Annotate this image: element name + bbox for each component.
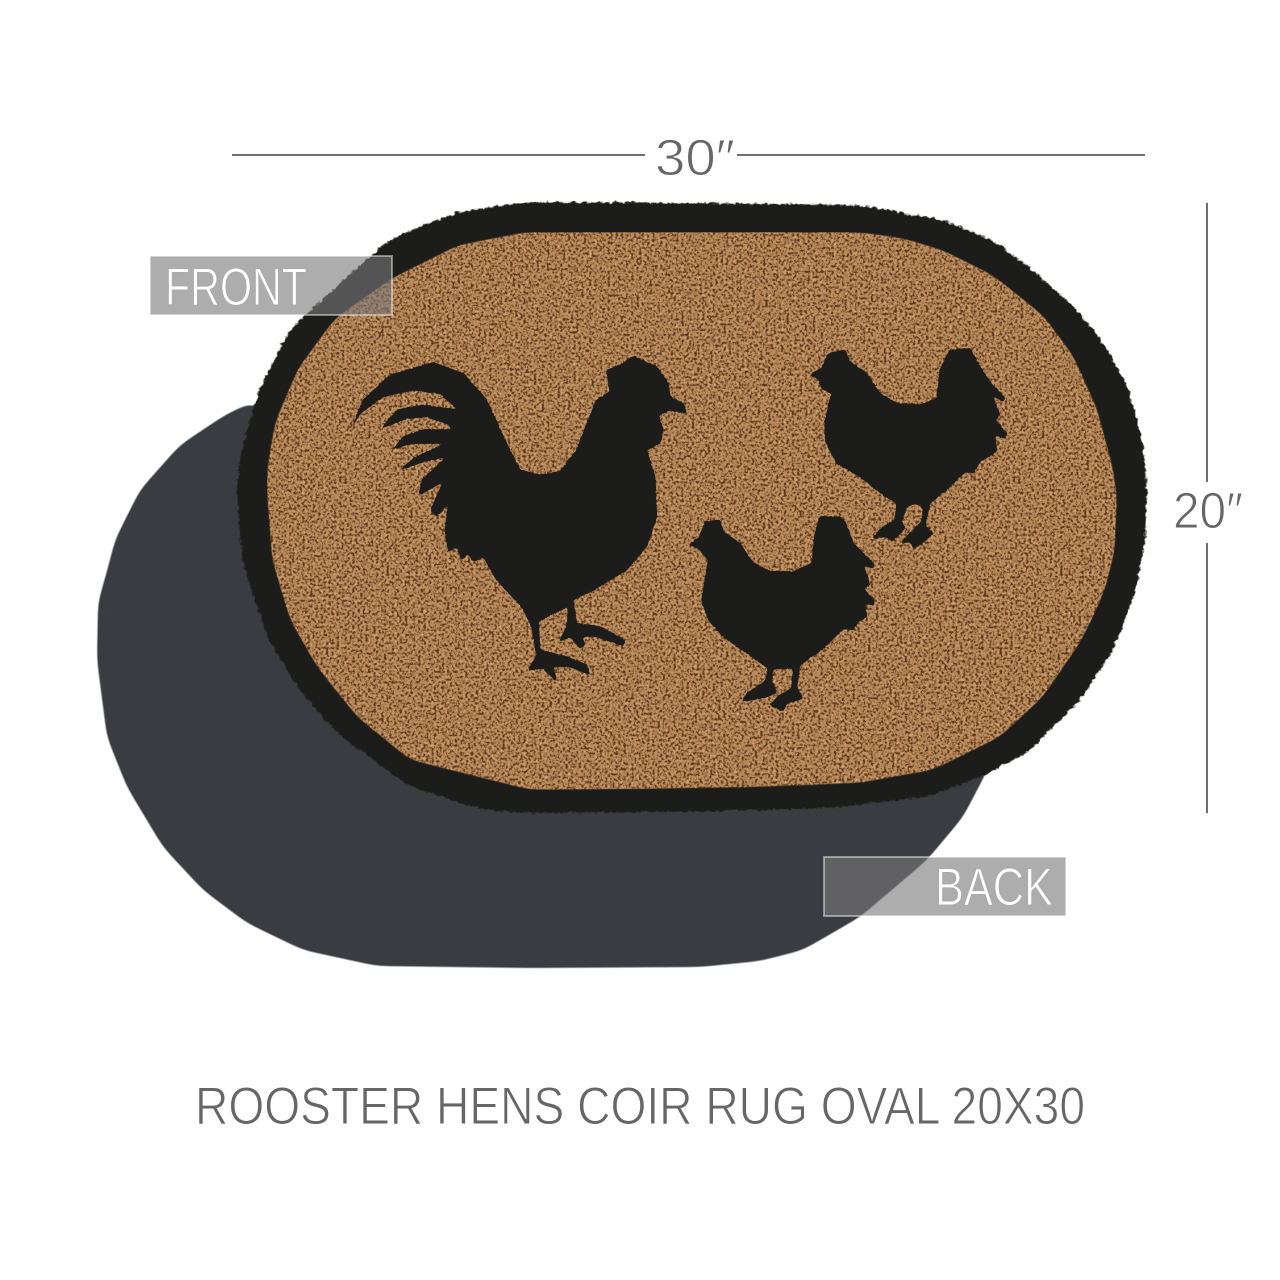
rug coir centre xyxy=(267,232,1117,790)
height dimension 20 inches: 20″ xyxy=(1173,482,1243,539)
label: back xyxy=(824,857,1066,917)
rug black border xyxy=(237,202,1147,813)
rug front side xyxy=(237,202,1147,813)
rooster silhouette xyxy=(347,356,687,682)
label: front: FRONT xyxy=(165,258,307,317)
hen silhouette lower middle xyxy=(688,517,875,712)
label: back: BACK xyxy=(935,858,1053,917)
rug back side xyxy=(97,402,1000,968)
width dimension 30 inches: 30″ xyxy=(655,129,735,186)
hen silhouette upper right xyxy=(809,348,1007,548)
title: ROOSTER HENS COIR RUG OVAL 20X30 xyxy=(195,1077,1085,1136)
